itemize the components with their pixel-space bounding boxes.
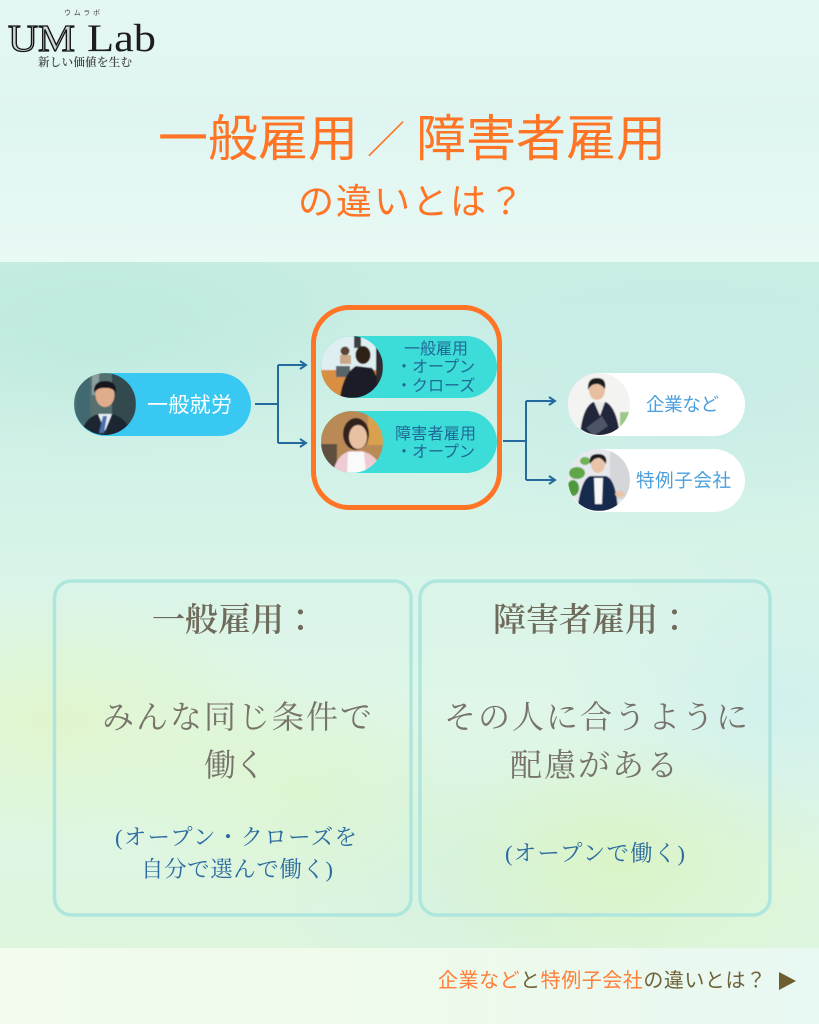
arrow: destinations branches: [503, 397, 555, 484]
logo tagline: 新しい価値を生む: [38, 55, 132, 69]
pill text: 障害者雇用: [395, 425, 476, 443]
title line 1: ／: [367, 120, 405, 162]
flow diagram: [74, 308, 745, 512]
pill text: 一般雇用: [404, 340, 468, 358]
arrow: general employment branches: [255, 361, 306, 447]
pill label: 一般就労: [147, 394, 232, 417]
panel: disability employment: [420, 581, 770, 915]
photo: woman in navy jacket: [567, 449, 630, 511]
footer next-page prompt: [438, 969, 796, 992]
panel: disability employment: 配慮がある: [510, 747, 678, 783]
photo: office meeting: [321, 336, 383, 398]
panel main text: その人に合うように: [444, 699, 748, 735]
footer text: 企業などと特例子会社の違いとは？: [438, 969, 766, 992]
panel note: (オープン・クローズを: [115, 825, 357, 850]
panel: general employment: 自分で選んで働く): [141, 857, 333, 882]
logo katakana: ウムラボ: [64, 9, 100, 17]
title line 1: 一般雇用: [158, 111, 358, 167]
logo wordmark UM: UM: [8, 18, 75, 60]
icon: next arrow: [779, 972, 796, 990]
logo wordmark Lab: Lab: [87, 17, 156, 60]
panel heading: 一般雇用：: [152, 602, 317, 639]
pill: open or closed: ・オープン: [396, 358, 475, 376]
pill label: 企業など: [646, 394, 719, 415]
pill: open only: [321, 411, 497, 473]
pill: open or closed: ・クローズ: [396, 377, 475, 395]
highlighted group: [314, 308, 500, 508]
title: [158, 111, 666, 222]
panel heading: 障害者雇用：: [493, 602, 691, 639]
pill: general employment: [74, 373, 251, 436]
orange frame: [314, 308, 500, 508]
pill label: 特例子会社: [636, 470, 731, 491]
pill: open only: ・オープン: [396, 443, 475, 461]
photo: man with folder: [568, 373, 630, 436]
photo: businessman: [74, 373, 136, 436]
title line 2: の違いとは？: [298, 181, 524, 222]
pill: special subsidiary: [567, 449, 745, 512]
panel: general employment: [54, 581, 411, 915]
title line 1: 障害者雇用: [416, 111, 666, 167]
pill: open or closed: [321, 336, 497, 398]
panel: general employment: 働く: [204, 747, 266, 783]
logo: [8, 9, 156, 69]
pill: companies: [568, 373, 745, 436]
photo: smiling woman: [321, 411, 383, 473]
panel main text: みんな同じ条件で: [102, 699, 372, 735]
panel note: (オープンで働く): [505, 841, 685, 866]
